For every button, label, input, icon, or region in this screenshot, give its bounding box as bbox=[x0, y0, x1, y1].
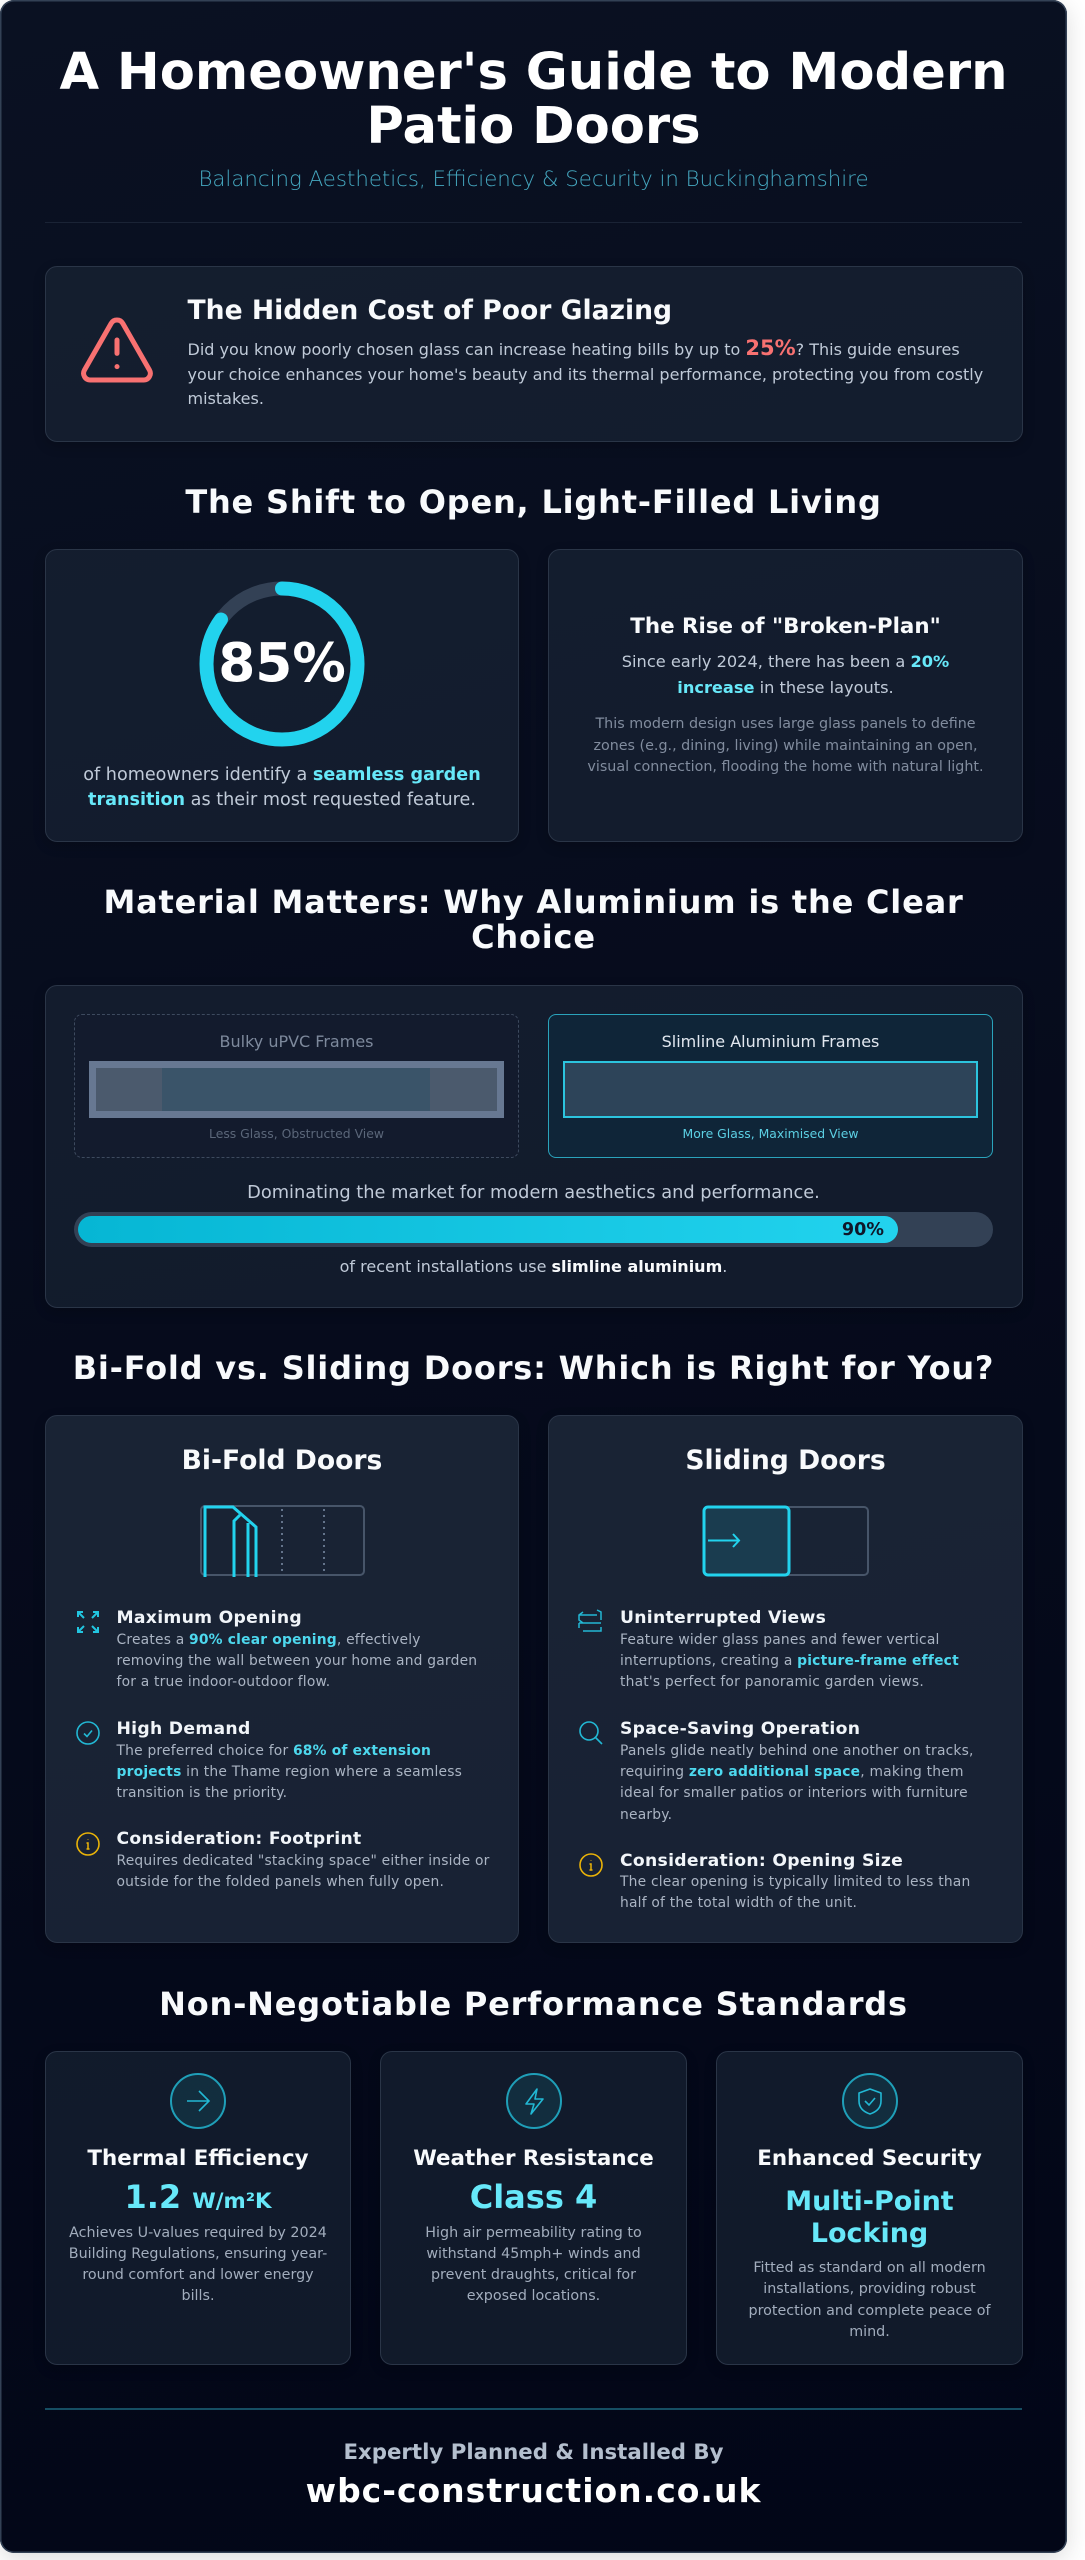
item title: space saving: Space-Saving Operation bbox=[620, 1718, 860, 1738]
aluminium label: Slimline Aluminium Frames bbox=[662, 1032, 879, 1050]
item text: uninterrupted views: Feature wider glass panes and fewer vertical bbox=[620, 1632, 940, 1648]
heading: performance standards: Non-Negotiable Performance Standards bbox=[159, 1985, 908, 2023]
heading: material matters: Choice bbox=[471, 918, 596, 956]
callout text: mistakes. bbox=[188, 389, 264, 408]
item title: opening size: Consideration: Opening Size bbox=[620, 1850, 903, 1870]
broken-plan description: This modern design uses large glass panels to define bbox=[595, 716, 976, 732]
security value bbox=[785, 2186, 954, 2249]
broken-plan description bbox=[587, 716, 984, 775]
security value: Locking bbox=[811, 2218, 928, 2249]
security value: Multi-Point bbox=[785, 2186, 954, 2217]
item text: space saving: Panels glide neatly behind one another on tracks, bbox=[620, 1742, 974, 1758]
callout heading: The Hidden Cost of Poor Glazing bbox=[188, 295, 672, 326]
bi-fold heading: Bi-Fold Doors bbox=[182, 1445, 382, 1476]
icon: shield check bbox=[842, 2073, 898, 2129]
icon: info circle bbox=[76, 1832, 100, 1856]
icon: wide view lines bbox=[578, 1609, 602, 1632]
callout text bbox=[188, 336, 983, 408]
icon: thermal arrow bbox=[170, 2073, 226, 2129]
item text: footprint bbox=[116, 1852, 490, 1890]
weather text: exposed locations. bbox=[467, 2288, 600, 2304]
stat caption: transition as their most requested feature. bbox=[88, 790, 476, 810]
weather text: withstand 45mph+ winds and bbox=[426, 2246, 641, 2262]
panel: thermal efficiency bbox=[45, 2051, 351, 2365]
progress bar: 90 percent bbox=[74, 1212, 993, 1247]
panel: hidden cost callout bbox=[45, 266, 1023, 442]
item text: uninterrupted views bbox=[620, 1632, 959, 1690]
aluminium caption: More Glass, Maximised View bbox=[683, 1126, 858, 1141]
thermal text: round comfort and lower energy bbox=[82, 2267, 314, 2283]
item text: space saving: requiring zero additional space, making them bbox=[620, 1764, 964, 1780]
security text: mind. bbox=[849, 2324, 890, 2340]
icon: bi-fold door diagram bbox=[200, 1505, 365, 1577]
icon: info circle bbox=[579, 1853, 603, 1877]
weather value: Class 4 bbox=[470, 2178, 597, 2216]
heading: open living: The Shift to Open, Light-Filled Living bbox=[185, 483, 882, 521]
upvc caption: Less Glass, Obstructed View bbox=[209, 1126, 384, 1141]
thermal value: 1.2 W/m²K bbox=[124, 2178, 272, 2216]
item text: opening size bbox=[620, 1874, 970, 1911]
item title: footprint: Consideration: Footprint bbox=[116, 1829, 362, 1849]
item text: footprint: Requires dedicated "stacking space" either inside or bbox=[116, 1852, 490, 1868]
progress caption: of recent installations use slimline aluminium. bbox=[340, 1256, 727, 1276]
item text: space saving: nearby. bbox=[620, 1807, 672, 1823]
footer label: Expertly Planned & Installed By bbox=[343, 2440, 724, 2465]
panel: broken-plan bbox=[548, 549, 1023, 842]
title bbox=[59, 42, 1008, 156]
item text: high demand: The preferred choice for 68% of extension bbox=[116, 1742, 431, 1758]
title: A Homeowner's Guide to Modern bbox=[59, 42, 1008, 102]
item text: high demand: projects in the Thame region where a seamless bbox=[116, 1764, 462, 1780]
sliding heading: Sliding Doors bbox=[685, 1445, 886, 1476]
footer website: wbc-construction.co.uk bbox=[306, 2471, 761, 2510]
security text bbox=[749, 2260, 991, 2340]
aluminium frame graphic bbox=[563, 1061, 978, 1118]
broken-plan description: visual connection, flooding the home with natural light. bbox=[587, 759, 984, 775]
broken-plan heading: The Rise of "Broken-Plan" bbox=[630, 614, 941, 639]
weather title: Weather Resistance bbox=[413, 2146, 654, 2170]
icon: sliding door diagram bbox=[702, 1506, 869, 1576]
item text: opening size: The clear opening is typically limited to less than bbox=[620, 1874, 970, 1890]
security text: installations, providing robust bbox=[763, 2281, 976, 2297]
upvc label: Bulky uPVC Frames bbox=[220, 1032, 374, 1050]
security text: Fitted as standard on all modern bbox=[753, 2260, 986, 2276]
item text: space saving bbox=[620, 1742, 974, 1823]
subtitle: Balancing Aesthetics, Efficiency & Security in Buckinghamshire bbox=[198, 167, 869, 192]
item text: footprint: outside for the folded panels when fully open. bbox=[116, 1874, 444, 1890]
weather text bbox=[425, 2224, 642, 2304]
item text: space saving: ideal for smaller patios or interiors with furniture bbox=[620, 1785, 968, 1801]
broken-plan stat text: increase in these layouts. bbox=[677, 678, 894, 696]
thermal text: Achieves U-values required by 2024 bbox=[69, 2224, 327, 2240]
icon: warning triangle bbox=[81, 318, 153, 382]
title: Patio Doors bbox=[366, 96, 701, 156]
panel: sliding doors bbox=[548, 1415, 1023, 1943]
item text: maximum opening bbox=[116, 1632, 477, 1690]
thermal text: bills. bbox=[182, 2288, 214, 2304]
item title: maximum opening: Maximum Opening bbox=[116, 1608, 302, 1628]
item text: uninterrupted views: interruptions, creating a picture-frame effect bbox=[620, 1653, 959, 1669]
weather text: prevent draughts, critical for bbox=[431, 2267, 636, 2283]
heading: material matters bbox=[103, 882, 964, 956]
item text: maximum opening: Creates a 90% clear opening, effectively bbox=[116, 1632, 421, 1648]
broken-plan description: zones (e.g., dining, living) while maintaining an open, bbox=[593, 738, 978, 754]
panel: enhanced security bbox=[716, 2051, 1023, 2365]
item text: maximum opening: for a true indoor-outdoor flow. bbox=[116, 1674, 330, 1690]
security title: Enhanced Security bbox=[757, 2146, 982, 2170]
icon: check circle bbox=[76, 1721, 100, 1745]
item text: maximum opening: removing the wall between your home and garden bbox=[116, 1653, 477, 1669]
icon: magnifier bbox=[579, 1721, 602, 1745]
broken-plan stat text: Since early 2024, there has been a 20% bbox=[622, 652, 949, 670]
thermal text bbox=[69, 2224, 327, 2304]
thermal text: Building Regulations, ensuring year- bbox=[69, 2246, 327, 2262]
callout text: your choice enhances your home's beauty and its thermal performance, protecting you from costly bbox=[188, 365, 983, 384]
item text: opening size: half of the total width of the unit. bbox=[620, 1895, 857, 1911]
weather text: High air permeability rating to bbox=[425, 2224, 642, 2240]
callout text: Did you know poorly chosen glass can increase heating bills by up to 25%? This guide ensures bbox=[188, 336, 960, 360]
heading: material matters: Material Matters: Why Aluminium is the Clear bbox=[103, 882, 964, 920]
progress bar: 90 percent: 90% bbox=[842, 1220, 884, 1240]
donut chart: 85 percent bbox=[200, 582, 364, 746]
panel: material comparison bbox=[45, 985, 1023, 1308]
icon: expand arrows bbox=[77, 1611, 99, 1633]
stat number: 85% bbox=[218, 632, 346, 694]
panel: 85 percent stat bbox=[45, 549, 519, 842]
item title: high demand: High Demand bbox=[116, 1718, 251, 1738]
item text: high demand bbox=[116, 1742, 462, 1801]
stat caption bbox=[83, 765, 481, 810]
panel: weather resistance bbox=[380, 2051, 687, 2365]
progress label: Dominating the market for modern aesthetics and performance. bbox=[247, 1182, 820, 1202]
panel: bi-fold doors bbox=[45, 1415, 519, 1943]
heading: bi-fold vs sliding: Bi-Fold vs. Sliding Doors: Which is Right for You? bbox=[73, 1349, 994, 1387]
stat caption: of homeowners identify a seamless garden bbox=[83, 765, 481, 785]
item text: high demand: transition is the priority. bbox=[116, 1785, 287, 1801]
upvc comparison box bbox=[74, 1014, 519, 1158]
icon: lightning bolt bbox=[506, 2073, 562, 2129]
security text: protection and complete peace of bbox=[749, 2303, 990, 2319]
aluminium comparison box bbox=[548, 1014, 993, 1158]
broken-plan stat text bbox=[622, 652, 949, 696]
upvc frame graphic bbox=[89, 1061, 504, 1118]
item text: uninterrupted views: that's perfect for panoramic garden views. bbox=[620, 1674, 924, 1690]
thermal title: Thermal Efficiency bbox=[87, 2146, 309, 2170]
item title: uninterrupted views: Uninterrupted Views bbox=[620, 1608, 826, 1628]
